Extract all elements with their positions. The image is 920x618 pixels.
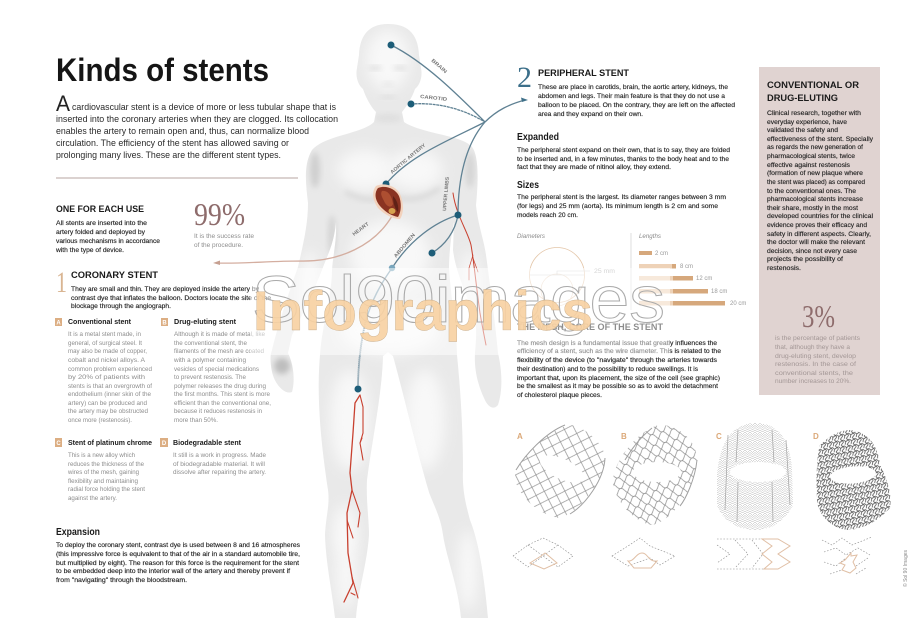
stent type B: drug-eluting: B (162, 320, 167, 326)
stent type D: biodegradable: It still is a work in progress. Made (173, 452, 267, 459)
artery routes with location markers: BRAIN (430, 58, 448, 75)
stent type B: drug-eluting (161, 318, 271, 424)
section: the mesh: important that, upon its placement, the size of the cell (see graphic) (517, 375, 720, 382)
artery routes with location markers: CAROTID (420, 94, 448, 103)
stat: 99%: It is the success rate (194, 233, 255, 240)
panel: conventional or drug-eluting: the doctor will make the relevant (767, 239, 865, 246)
panel: conventional or drug-eluting: DRUG-ELUTING (767, 93, 838, 104)
section: peripheral stent: 2 (517, 61, 532, 94)
diagram: diameters (517, 234, 615, 306)
stent type A: conventional: It is a metal stent made, in (68, 331, 141, 338)
arm arteries (453, 193, 486, 345)
section: expansion: Expansion (56, 526, 100, 538)
section: expansion: from "navigating" through the bloodstream. (56, 577, 187, 584)
stent type A: conventional: endothelium (inner skin of the (68, 391, 152, 398)
stent type A: conventional: Conventional stent (68, 319, 132, 326)
intro text (56, 91, 338, 160)
section: the mesh: efficiency of a stent, such as the wire diameter. This is related to the (517, 348, 721, 355)
stent type A: conventional: once more (restenosis). (68, 417, 132, 424)
stent type C: platinum chrome: radial force holding the stent (68, 486, 145, 493)
section: the mesh: THE MESH, CORE OF THE STENT (517, 322, 663, 332)
body highlights (300, 30, 480, 610)
section: peripheral stent: These are place in carotids, brain, the aortic artery, kidneys, the (538, 84, 728, 91)
section: coronary stent: They are small and thin. They are deployed inside the artery by (71, 286, 260, 293)
stent type D: biodegradable: of biodegradable material. It will (173, 461, 265, 468)
section: sizes: models reach 20 cm. (517, 212, 578, 219)
panel: conventional or drug-eluting: pharmacological stents increase (767, 196, 863, 203)
stent illustration C: C (716, 432, 722, 441)
section: one for each use: All stents are inserted into the (56, 220, 147, 227)
panel: conventional or drug-eluting: drug-eluting stent, develop (775, 353, 857, 360)
section: the mesh: be the smallest as it may be possible so as to avoid the detachment (517, 383, 718, 390)
stent type B: drug-eluting: because it reduces restenosis in (174, 408, 262, 415)
icon: heart (373, 184, 403, 219)
stent illustration C (716, 423, 793, 530)
section: peripheral stent (517, 61, 735, 118)
panel: conventional or drug-eluting: restenosis. (767, 265, 801, 272)
panel: conventional or drug-eluting: Clinical research, together with (767, 110, 861, 117)
artery routes with location markers (213, 42, 528, 392)
section: expanded: Expanded (517, 131, 559, 143)
section: expansion: but multiplied by eight). The reason for this force is the requirement for the stent (56, 560, 299, 567)
section: one for each use: with the type of device. (55, 247, 124, 254)
stent illustration A: A (517, 432, 523, 441)
intro text: circulation. The efficiency of the stent has allowed saving or (56, 137, 289, 148)
panel: conventional or drug-eluting: developed countries for the clinical (767, 213, 874, 220)
stat: 3%: 3% (802, 298, 835, 334)
section: the mesh: their destination) and to the possibility to reduce swellings. It is (517, 366, 699, 373)
section: the mesh: The mesh design is a fundamental issue that greatly influences the (517, 340, 717, 347)
panel: conventional or drug-eluting: that, although they have a (775, 344, 851, 351)
section: coronary stent: contrast dye that inflates the balloon. Doctors locate the site of the (71, 295, 271, 302)
panel: conventional or drug-eluting: number increases to 20%. (775, 378, 851, 385)
intro text: prolonging many lives. These are the different stent types. (56, 149, 281, 160)
intro text: inserted into the coronary arteries when they are clogged. Its collocation (56, 113, 338, 124)
stent type A: conventional: stents is that an overgrowth of (68, 383, 152, 390)
panel: conventional or drug-eluting: as regards the new generation of (767, 144, 863, 151)
section: expansion: (this impressive force is equivalent to that of the air in a standard automobile tire, (56, 551, 300, 558)
stent type B: drug-eluting: efficient than the conventional one, (174, 400, 271, 407)
panel: conventional or drug-eluting: safety in different aspects. Clearly, (767, 231, 871, 238)
stent type B: drug-eluting: the first months. This stent is more (174, 391, 271, 398)
section: peripheral stent: balloon to be placed. On the contrary, they are left on the affected (538, 102, 735, 109)
section: one for each use (55, 204, 160, 254)
artery routes with location markers: UPPER LIMBS (442, 176, 451, 211)
stent type B: drug-eluting: more than 50%. (174, 417, 218, 424)
stent type A: conventional (55, 318, 152, 424)
panel: conventional or drug-eluting: effective against restenosis (767, 162, 851, 169)
copyright: © Sol 90 Images (902, 550, 909, 587)
stent type C: platinum chrome: This is a new alloy which (68, 452, 135, 459)
bar chart: lengths: 18 cm (711, 289, 727, 295)
intro text: enables the artery to remain open and, thus, can normalize blood (56, 125, 309, 136)
watermark band (250, 268, 670, 355)
panel: conventional or drug-eluting (759, 67, 880, 395)
artery routes with location markers: ABDOMEN (393, 232, 417, 259)
stent type A: conventional: A (56, 320, 61, 326)
panel: conventional or drug-eluting: (formation of new plaque where (767, 170, 863, 177)
stat: 99%: of the procedure. (194, 242, 243, 249)
section: the mesh (517, 322, 721, 399)
stent illustration D (813, 430, 891, 530)
stent type C: platinum chrome: flexibility and maintaining (68, 478, 138, 485)
stent type B: drug-eluting: vesicles of special medications (174, 366, 259, 373)
panel: conventional or drug-eluting: validated the safety and (767, 127, 838, 134)
cell diagram A (513, 538, 573, 569)
section: the mesh: flexibility of the device (to "navigate" through the arteries towards (517, 357, 718, 364)
title: Kinds of stents (56, 52, 269, 88)
stent type D: biodegradable: Biodegradable stent (173, 440, 242, 447)
stent type C: platinum chrome: wires of the mesh, gaining (67, 469, 139, 476)
stent illustration B (613, 425, 697, 525)
stent type B: drug-eluting: to prevent restenosis. The (174, 374, 247, 381)
panel: conventional or drug-eluting: projects the possibility of (767, 256, 843, 263)
section: coronary stent: CORONARY STENT (71, 270, 158, 281)
section: one for each use: artery folded and deployed by (56, 229, 146, 236)
stent type B: drug-eluting: Although it is made of metal, like (174, 331, 266, 338)
section: expansion: to be embedded deep into the interior wall of the artery and thereby prevent if (56, 568, 290, 575)
section: sizes: Sizes (517, 179, 539, 191)
stent type B: drug-eluting: Drug-eluting stent (174, 319, 237, 326)
arrow to coronary stent (213, 260, 220, 265)
stent type C: platinum chrome: C (56, 441, 61, 447)
body figure (260, 20, 510, 618)
panel: conventional or drug-eluting: their share, mostly in the most (767, 205, 858, 212)
section: expanded (517, 131, 730, 171)
stat: 99% (194, 196, 255, 249)
section: coronary stent: 1 (56, 266, 67, 299)
section: peripheral stent: area and they expand on their own. (538, 111, 643, 118)
bar chart: lengths: Lengths (639, 234, 661, 240)
bar chart: lengths: 2 cm (655, 251, 668, 257)
stat: 99%: 99% (194, 196, 245, 232)
cell diagram B (612, 538, 675, 568)
panel: conventional or drug-eluting: restenosis. In the case of (775, 361, 856, 368)
leg arteries (344, 395, 363, 602)
section: expansion: To deploy the coronary stent, contrast dye is used between 8 and 16 atmospheres (56, 542, 301, 549)
intro text: cardiovascular stent is a device of more or less tubular shape that is (72, 101, 336, 112)
stent type D: biodegradable: dissolve after repairing the artery. (173, 469, 266, 476)
diagram: diameters: Diameters (517, 234, 545, 240)
diagram: diameters: 25 mm (594, 269, 615, 275)
bar chart: lengths: 8 cm (680, 264, 693, 270)
stent type B: drug-eluting: polymer releases the drug during (174, 383, 266, 390)
stent type D: biodegradable (160, 438, 267, 476)
stent type C: platinum chrome (55, 438, 152, 502)
section: sizes (517, 179, 727, 219)
stent illustration D: D (813, 432, 819, 441)
section: sizes: (for legs) and 25 mm (aorta). Its minimum length is 2 cm and some (517, 203, 718, 210)
panel: conventional or drug-eluting: is the percentage of patients (775, 335, 860, 342)
stent type A: conventional: general, of surgical steel. It (68, 340, 142, 347)
stent type A: conventional: by 20% of patients with (68, 374, 145, 381)
section: coronary stent (56, 266, 271, 310)
stent type A: conventional: the artery may be obstructed (68, 408, 148, 415)
bar chart: lengths: 12 cm (696, 276, 712, 282)
section: peripheral stent: abdomen and legs. Their main feature is that they do not use a (538, 93, 725, 100)
section: expansion (56, 526, 301, 584)
section: one for each use: various mechanisms in accordance (56, 238, 160, 245)
panel: conventional or drug-eluting: pharmacological stents, twice (767, 153, 855, 160)
stent type B: drug-eluting: filaments of the mesh are coated (174, 348, 264, 355)
section: expanded: fact that they are made of nitinol alloy, they extend. (517, 164, 671, 171)
panel: conventional or drug-eluting: to the conventional ones. The (767, 188, 856, 195)
cell diagram C (717, 539, 790, 569)
panel: conventional or drug-eluting: effectiveness of the stent. Specially (767, 136, 874, 143)
stent type A: conventional: may also be made of copper, (68, 348, 147, 355)
bar chart: lengths: 20 cm (730, 301, 746, 307)
stent type D: biodegradable: D (162, 441, 167, 447)
section: the mesh: of cholesterol plaque pieces. (517, 392, 602, 399)
panel: conventional or drug-eluting: conventional stents, the (775, 370, 854, 377)
artery routes with location markers: AORTIC ARTERY (389, 142, 428, 176)
face and muscle shading (274, 66, 475, 374)
artery routes with location markers: HEART (352, 221, 370, 238)
watermark: orange wordmark: Infographics (253, 279, 593, 342)
watermark: outlined wordmark: Sol90images (252, 262, 665, 336)
stent illustration A (515, 425, 605, 518)
section: peripheral stent: PERIPHERAL STENT (538, 68, 629, 79)
panel: conventional or drug-eluting: the stent was placed) as compared (767, 179, 865, 186)
stent type A: conventional: common problem experienced (68, 366, 152, 373)
stent illustration B: B (621, 432, 627, 441)
section: coronary stent: blockage through the angiograph. (71, 303, 171, 310)
section: expanded: to be inserted and, in a few minutes, thanks to the body heat and to the (517, 156, 729, 163)
stent type C: platinum chrome: Stent of platinum chrome (68, 440, 152, 447)
panel: conventional or drug-eluting: evidence proves their efficacy and (767, 222, 867, 229)
panel: conventional or drug-eluting: CONVENTIONAL OR (767, 80, 859, 91)
arrow to peripheral stent (521, 98, 528, 102)
stent type C: platinum chrome: reduces the thickness of the (68, 461, 145, 468)
stent type C: platinum chrome: against the artery. (68, 495, 117, 502)
panel: conventional or drug-eluting: decision, since not every case (767, 248, 857, 255)
section: sizes: The peripheral stent is the largest. Its diameter ranges between 3 mm (517, 194, 727, 201)
intro text: A (56, 91, 70, 116)
stent type A: conventional: artery) can be produced and (68, 400, 147, 407)
section: expanded: The peripheral stent expand on their own, that is to say, they are folded (517, 147, 730, 154)
section: one for each use: ONE FOR EACH USE (56, 204, 144, 215)
stent type B: drug-eluting: the conventional stent, the (174, 340, 248, 347)
stent type A: conventional: cobalt and nickel alloys. A (68, 357, 146, 364)
bar chart: lengths (631, 233, 746, 310)
panel: conventional or drug-eluting: everyday experience, have (767, 119, 847, 126)
cell diagram D (822, 537, 872, 574)
stent type B: drug-eluting: with a polymer containing (173, 357, 246, 364)
